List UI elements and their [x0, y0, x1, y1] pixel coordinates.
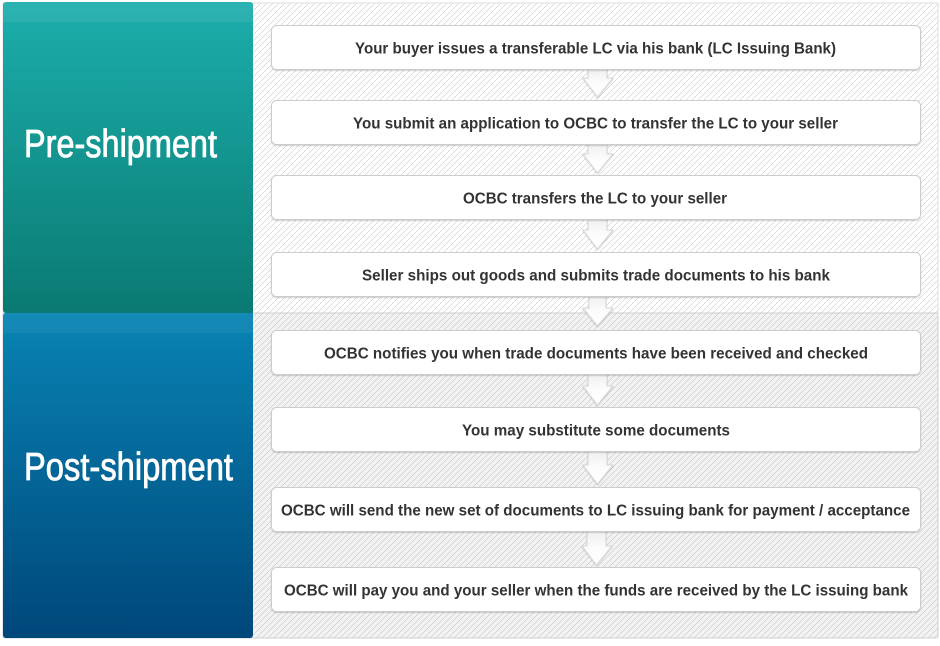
- arrow 3: [583, 219, 613, 249]
- step 8: [272, 568, 920, 612]
- step 2: [272, 100, 920, 144]
- arrow 5: [583, 374, 613, 405]
- step 6: [272, 408, 920, 452]
- step 5: OCBC notifies you when trade documents have been received and checked: [324, 346, 868, 362]
- panel: Pre-shipment heading block: [3, 2, 253, 313]
- arrow 7: [582, 531, 612, 565]
- arrow 6: [583, 451, 613, 484]
- heading: Pre-shipment: Pre-shipment: [24, 123, 217, 166]
- step 2: You submit an application to OCBC to transfer the LC to your seller: [353, 116, 838, 132]
- step 3: [272, 176, 920, 220]
- arrow 1: [583, 69, 613, 97]
- panel: hatched background, post-shipment: [3, 313, 938, 638]
- step 7: [272, 488, 920, 532]
- step 8: OCBC will pay you and your seller when the funds are received by the LC issuing bank: [284, 582, 908, 600]
- step 5: [272, 330, 920, 374]
- arrow 2: [583, 144, 613, 173]
- step 4: Seller ships out goods and submits trade documents to his bank: [362, 268, 830, 284]
- panel: Post-shipment heading block: [3, 313, 253, 638]
- step 7: OCBC will send the new set of documents to LC issuing bank for payment / acceptance: [281, 502, 910, 520]
- heading: Post-shipment: Post-shipment: [24, 446, 233, 489]
- panel: hatched background, pre-shipment: [3, 3, 938, 313]
- step 3: OCBC transfers the LC to your seller: [463, 190, 727, 208]
- step 1: Your buyer issues a transferable LC via his bank (LC Issuing Bank): [355, 40, 836, 58]
- arrow 4: [583, 296, 613, 326]
- step 1: [272, 26, 920, 70]
- step 6: You may substitute some documents: [462, 422, 730, 440]
- step 4: [272, 252, 920, 296]
